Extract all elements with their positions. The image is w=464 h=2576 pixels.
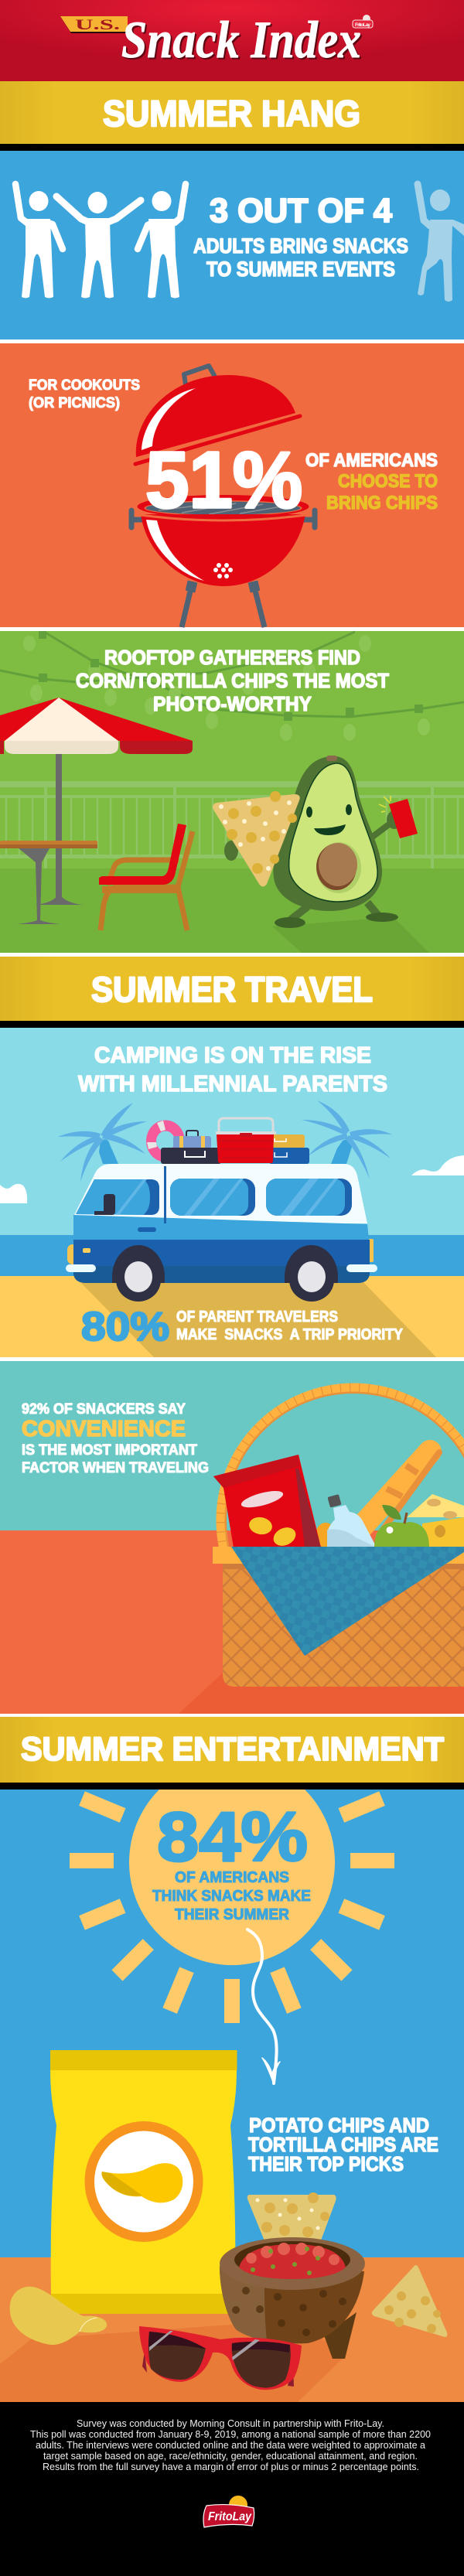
stat: 84%: 84% <box>157 1799 308 1876</box>
apple <box>374 1505 429 1547</box>
stat: 80% <box>81 1305 404 1349</box>
text: of Americans choose chips: OF AMERICANS <box>305 450 438 471</box>
footer: survey note <box>0 2402 464 2576</box>
stat: 84%: THEIR SUMMER <box>175 1906 290 1923</box>
stat text <box>193 192 408 281</box>
arrow <box>247 1929 280 2084</box>
Frito-Lay logo <box>203 2496 254 2527</box>
footer: survey note: Survey was conducted by Morning Consult in partnership with Frito-Lay. <box>77 2417 384 2429</box>
heading text: WITH MILLENNIAL PARENTS <box>78 1072 387 1097</box>
text: top picks: POTATO CHIPS AND <box>249 2114 429 2137</box>
stat: 84%: THINK SNACKS MAKE <box>152 1888 311 1905</box>
section heading: Summer Entertainment <box>0 1717 464 1783</box>
chip bag <box>213 1455 336 1549</box>
icon: sun <box>70 1790 394 2023</box>
section heading: Summer Travel <box>0 957 464 1021</box>
footer: survey note: This poll was conducted from January 8-9, 2019, among a national sample of more than 2200 <box>30 2428 431 2440</box>
tortilla chip <box>213 791 300 886</box>
footer: survey note: adults. The interviews were conducted online and the data were weighted to approximate a <box>36 2439 426 2451</box>
section heading: Summer Hang <box>0 81 464 144</box>
panel: camping van <box>0 1028 464 1357</box>
panel: cookouts 51% <box>0 343 464 627</box>
U.S. tag <box>60 16 128 33</box>
small Frito-Lay logo: FritoLay <box>355 22 370 28</box>
text: top picks <box>248 2114 438 2175</box>
molcajete with salsa and chip <box>220 2192 365 2359</box>
stat: 84% <box>152 1799 311 1923</box>
wheels <box>66 1245 377 1302</box>
clouds <box>0 1155 464 1203</box>
icon: three white people <box>15 184 186 299</box>
panel: picnic basket convenience <box>0 1361 464 1714</box>
text: convenience: 92% OF SNACKERS SAY <box>22 1401 186 1418</box>
footer: survey note: Results from the full survey have a margin of error of plus or minus 2 percentage points. <box>43 2461 419 2472</box>
palm trees <box>58 1100 392 1182</box>
sunglasses <box>139 2326 302 2390</box>
Snack Index title: Snack Index <box>121 10 361 69</box>
Frito-Lay logo: FritoLay <box>208 2510 252 2523</box>
heading text <box>76 646 389 715</box>
stat: 51%: 51% <box>145 435 302 524</box>
Snack Index title: Snack Index <box>123 12 363 70</box>
stat text: ADULTS BRING SNACKS <box>193 234 408 258</box>
text: for cookouts <box>29 377 140 411</box>
heading text: CORN/TORTILLA CHIPS THE MOST <box>76 669 389 692</box>
text: convenience: CONVENIENCE <box>22 1417 186 1442</box>
stat text: TO SUMMER EVENTS <box>206 258 395 281</box>
text: convenience <box>22 1401 209 1476</box>
panel: 3 out of 4 adults <box>0 151 464 339</box>
text: convenience: FACTOR WHEN TRAVELING <box>22 1460 209 1476</box>
umbrella and table <box>0 698 193 924</box>
wicker basket <box>213 1547 464 1687</box>
cheese wedge <box>407 1494 464 1547</box>
ground shadow <box>272 917 429 953</box>
luggage on roof <box>146 1118 309 1164</box>
text: convenience: IS THE MOST IMPORTANT <box>22 1442 197 1459</box>
string lights <box>0 631 464 741</box>
text: of Americans choose chips: BRING CHIPS <box>326 493 438 513</box>
cooler <box>216 1118 276 1163</box>
stat: 84%: OF AMERICANS <box>175 1869 289 1886</box>
baguette <box>361 1452 439 1535</box>
stat: 80%: OF PARENT TRAVELERS <box>176 1308 338 1326</box>
stat text: 3 OUT OF 4 <box>210 192 393 230</box>
small Frito-Lay logo <box>353 15 373 28</box>
basket handle <box>220 1387 464 1653</box>
text: for cookouts: FOR COOKOUTS <box>29 377 140 394</box>
phone <box>389 799 418 838</box>
heading text <box>78 1043 387 1097</box>
yellow chip bag <box>50 2050 237 2314</box>
panel: rooftop gatherers <box>0 631 464 953</box>
heading text: PHOTO-WORTHY <box>153 692 312 715</box>
stat: 80%: MAKE SNACKS A TRIP PRIORITY <box>176 1326 404 1343</box>
tortilla chip on floor <box>372 2265 447 2337</box>
water bottle <box>327 1494 377 1547</box>
text: top picks: THEIR TOP PICKS <box>248 2152 404 2175</box>
stat: 80%: 80% <box>81 1305 169 1349</box>
footer: survey note: target sample based on age, race/ethnicity, gender, educational attainment, and region. <box>43 2450 418 2462</box>
heading text: ROOFTOP GATHERERS FIND <box>104 646 360 669</box>
icon: faded fourth person <box>418 184 464 302</box>
text: top picks: TORTILLA CHIPS ARE <box>248 2133 438 2156</box>
avocado with chip and phone <box>213 756 418 928</box>
text: for cookouts: (OR PICNICS) <box>29 395 120 411</box>
text: of Americans choose chips: CHOOSE TO <box>338 471 438 492</box>
panel: 84% and chips <box>0 1790 464 2402</box>
heading text: CAMPING IS ON THE RISE <box>94 1043 371 1068</box>
header banner <box>0 0 464 81</box>
camper van <box>66 1164 377 1302</box>
potato chip <box>10 2287 107 2345</box>
section heading: Summer Entertainment: SUMMER ENTERTAINMENT <box>21 1731 444 1768</box>
section heading: Summer Travel: SUMMER TRAVEL <box>91 970 373 1009</box>
section heading: Summer Hang: SUMMER HANG <box>103 93 360 134</box>
U.S. tag: U.S. <box>75 17 120 33</box>
text: of Americans choose chips <box>305 450 438 513</box>
chair <box>99 824 193 930</box>
van windows <box>76 1179 352 1216</box>
railing <box>0 781 464 868</box>
icon: red kettle grill <box>131 366 315 627</box>
